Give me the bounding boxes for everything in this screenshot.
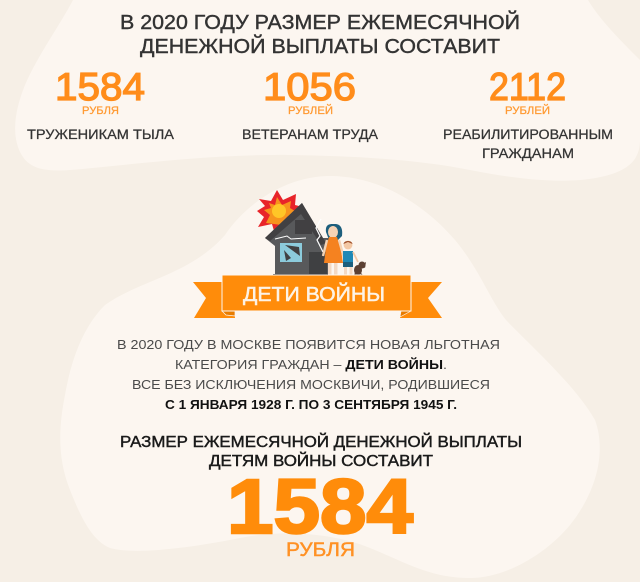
description text: С 1 ЯНВАРЯ 1928 Г. ПО 3 СЕНТЯБРЯ 1945 Г.	[165, 397, 457, 412]
stat: labour veterans: 1056	[263, 66, 356, 109]
stat: rehabilitated citizens	[443, 66, 613, 161]
icon: mother	[323, 224, 344, 275]
illustration: burning house and family	[257, 190, 366, 276]
description text	[117, 337, 500, 412]
stat: rehabilitated citizens: 2112	[489, 66, 566, 109]
title	[120, 10, 520, 58]
stat: labour veterans	[242, 66, 378, 142]
icon: boy	[343, 241, 358, 275]
big number: 1584	[227, 464, 413, 550]
stat: home front workers: ТРУЖЕНИКАМ ТЫЛА	[27, 127, 174, 142]
description text: ВСЕ БЕЗ ИСКЛЮЧЕНИЯ МОСКВИЧИ, РОДИВШИЕСЯ	[132, 377, 490, 392]
stat: labour veterans: РУБЛЕЙ	[288, 104, 333, 117]
subheading	[120, 432, 522, 470]
description text: КАТЕГОРИЯ ГРАЖДАН – ДЕТИ ВОЙНЫ .	[175, 357, 447, 372]
ribbon banner	[193, 275, 442, 318]
stat: rehabilitated citizens: ГРАЖДАНАМ	[482, 146, 574, 161]
icon: explosion	[257, 190, 303, 231]
stat: rehabilitated citizens: РУБЛЕЙ	[505, 104, 550, 117]
stat: rehabilitated citizens: РЕАБИЛИТИРОВАННЫМ	[443, 127, 613, 142]
stat: home front workers: 1584	[55, 66, 145, 109]
icon: teddy bear	[354, 262, 366, 276]
description text: В 2020 ГОДУ В МОСКВЕ ПОЯВИТСЯ НОВАЯ ЛЬГОТНАЯ	[117, 337, 500, 352]
stat: home front workers: РУБЛЯ	[82, 105, 119, 117]
stat: labour veterans: ВЕТЕРАНАМ ТРУДА	[242, 127, 378, 142]
subheading: РАЗМЕР ЕЖЕМЕСЯЧНОЙ ДЕНЕЖНОЙ ВЫПЛАТЫ	[120, 432, 522, 451]
banner text: ДЕТИ ВОЙНЫ	[243, 282, 385, 306]
big number unit: РУБЛЯ	[286, 540, 355, 561]
subheading: ДЕТЯМ ВОЙНЫ СОСТАВИТ	[209, 451, 433, 470]
icon: damaged house	[265, 203, 329, 276]
stat: home front workers	[27, 66, 174, 142]
title: ДЕНЕЖНОЙ ВЫПЛАТЫ СОСТАВИТ	[140, 34, 500, 58]
title: В 2020 ГОДУ РАЗМЕР ЕЖЕМЕСЯЧНОЙ	[120, 10, 520, 34]
